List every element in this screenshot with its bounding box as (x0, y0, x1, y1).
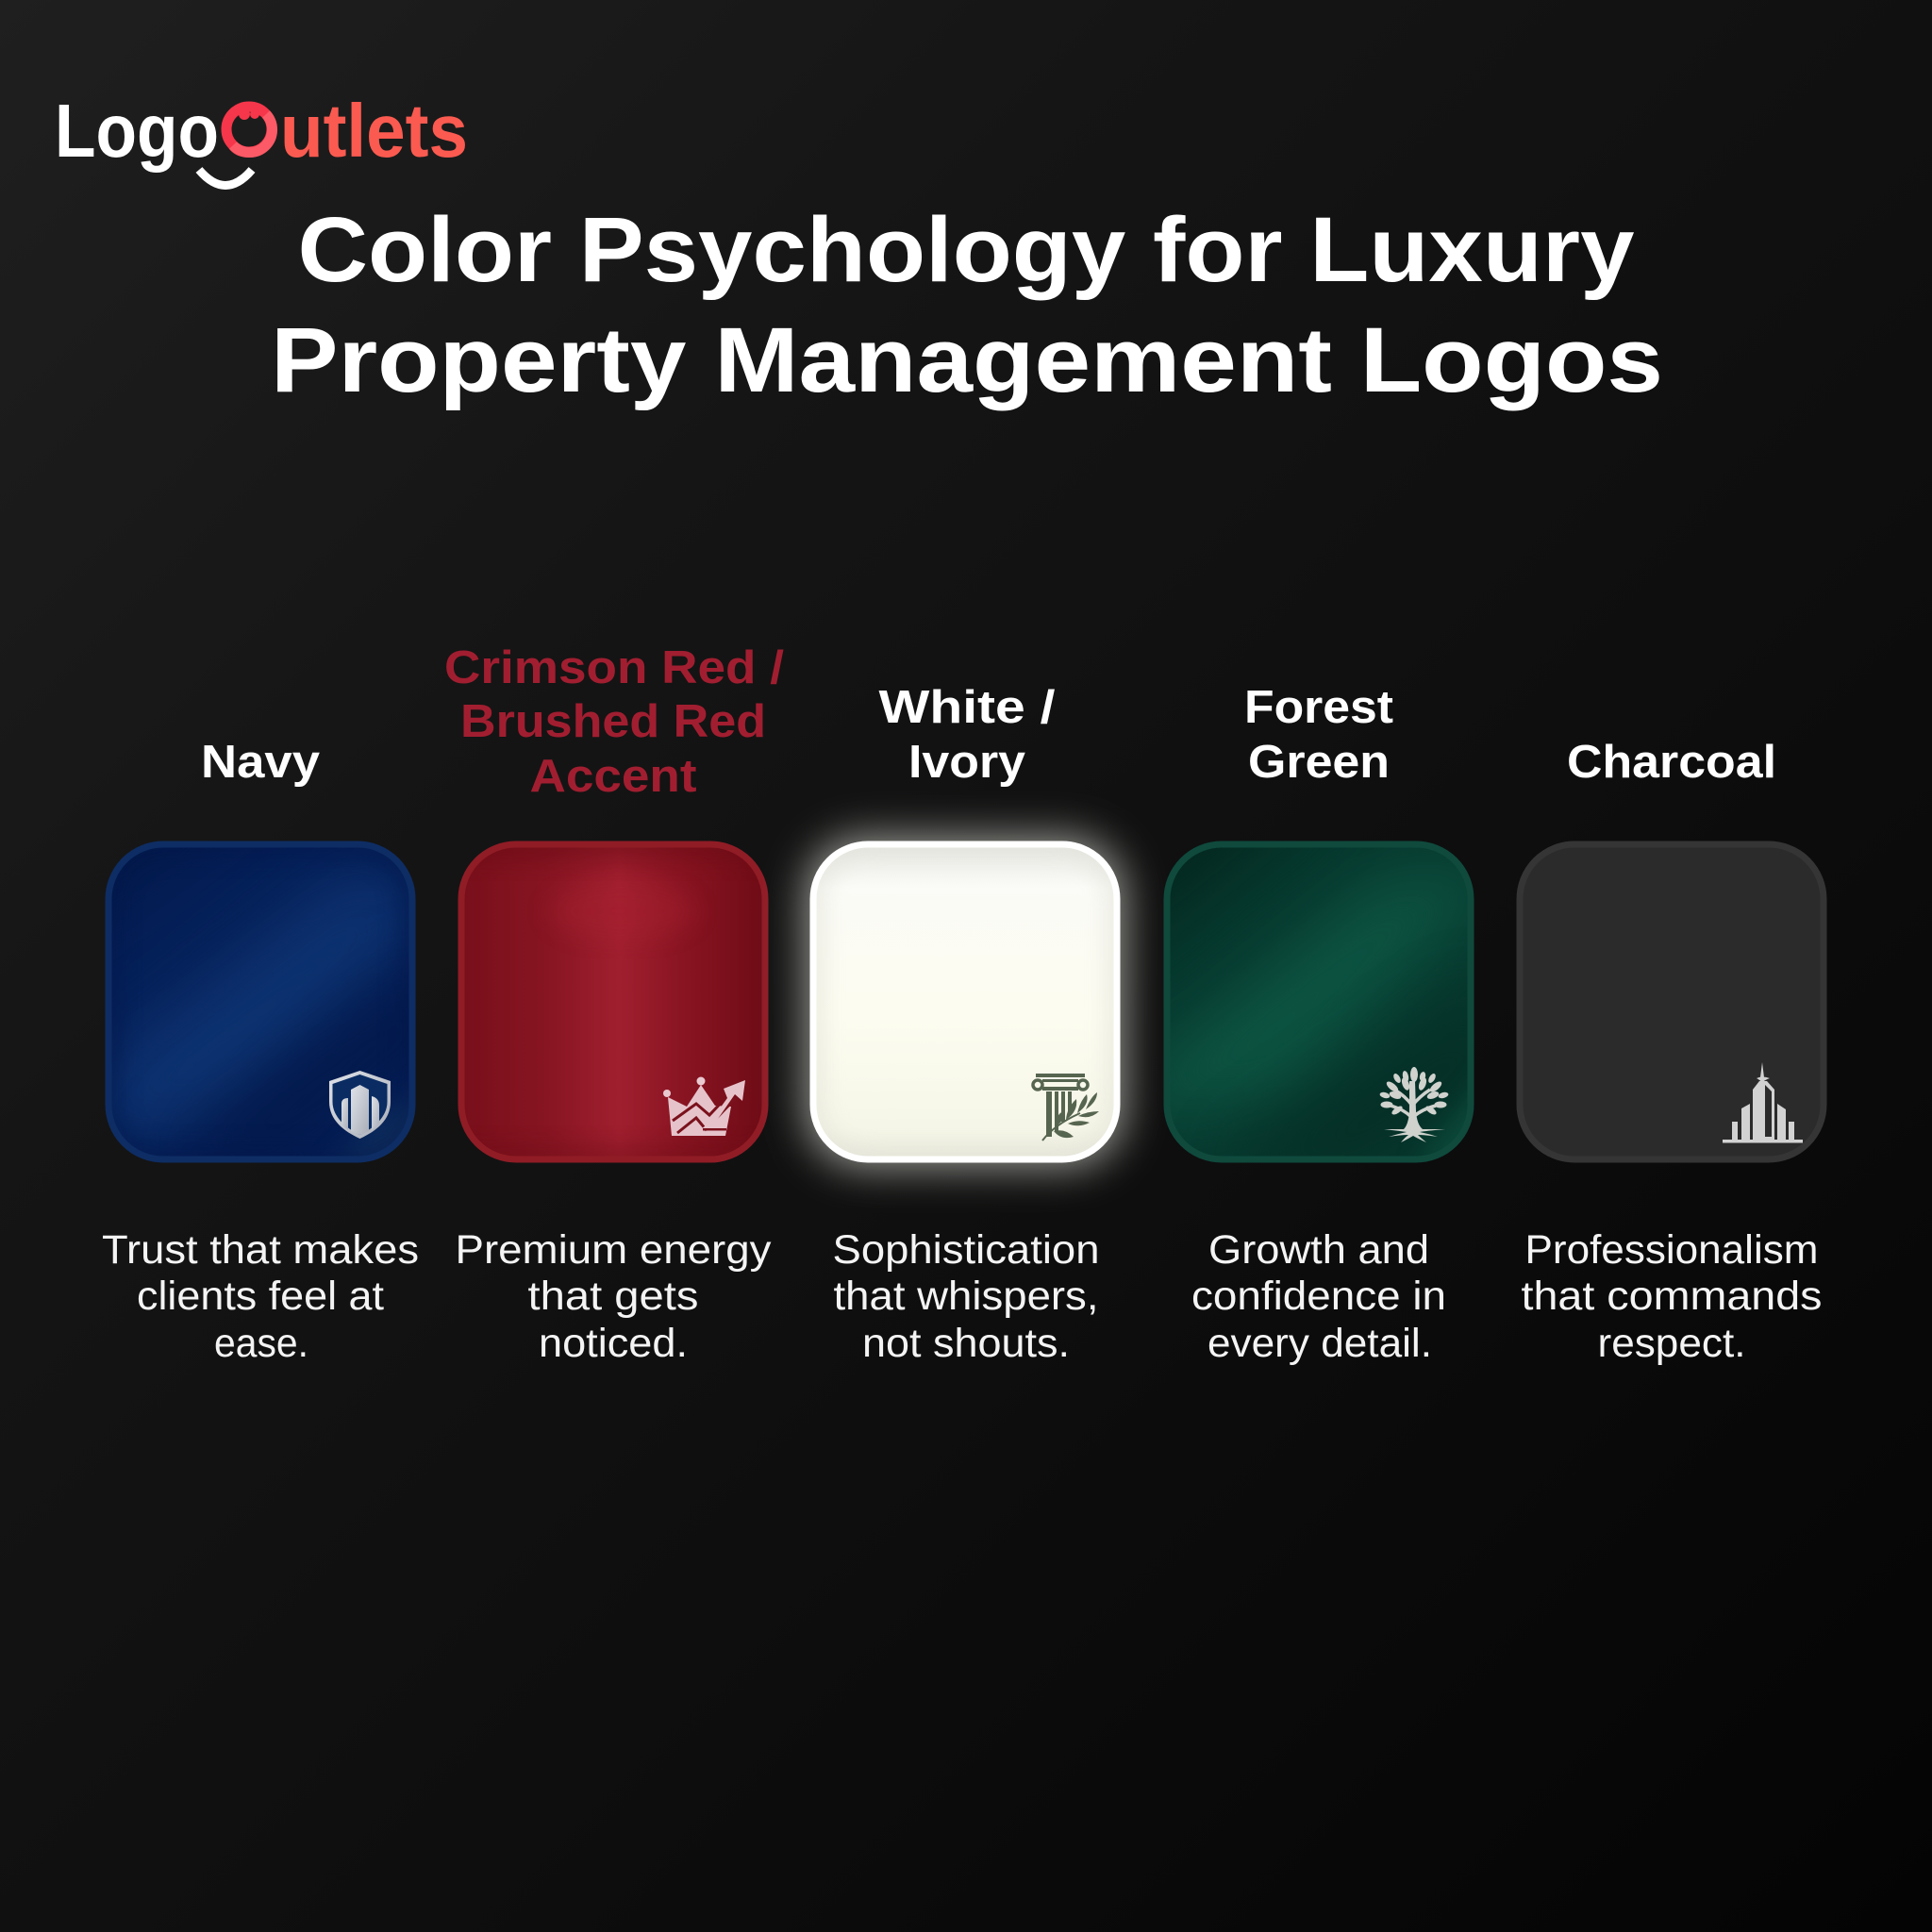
heading: forest green: Green (1248, 737, 1390, 788)
heading: white / ivory: Ivory (908, 737, 1025, 788)
icon: column with olive branch (1033, 1074, 1099, 1141)
logo: LogoOutlets: O (221, 89, 277, 173)
description: forest green: Growth and (1208, 1227, 1429, 1273)
heading: charcoal: Charcoal (1567, 737, 1776, 788)
heading: white / ivory (879, 682, 1056, 788)
panel: crimson red (439, 642, 788, 1366)
logo: LogoOutlets: Logo (55, 89, 219, 173)
panel: white / ivory (806, 682, 1124, 1366)
swatch: forest green (1164, 841, 1474, 1162)
title (271, 198, 1663, 411)
title: Color Psychology for Luxury (298, 198, 1635, 301)
panel: forest green (1164, 691, 1474, 1365)
icon: shield with towers (329, 1071, 391, 1139)
heading: crimson red: Crimson Red / (444, 642, 784, 693)
description: white / ivory: not shouts. (862, 1321, 1070, 1366)
heading: forest green (1244, 682, 1393, 788)
description: forest green: every detail. (1208, 1321, 1432, 1366)
panel: charcoal (1520, 737, 1824, 1366)
swatch: navy (106, 841, 415, 1162)
swatch: crimson red (458, 841, 768, 1162)
heading: crimson red (444, 642, 784, 802)
swatch: white / ivory (806, 837, 1124, 1167)
logo: LogoOutlets: utlets (280, 89, 468, 173)
panel: navy (103, 745, 417, 1357)
description: charcoal: Professionalism (1524, 1227, 1819, 1273)
description: crimson red (455, 1227, 772, 1366)
description: forest green (1191, 1227, 1446, 1366)
description: white / ivory (832, 1227, 1100, 1366)
description: navy: ease. (214, 1321, 308, 1366)
heading: crimson red: Accent (530, 751, 696, 802)
description: white / ivory: Sophistication (832, 1227, 1100, 1273)
description: charcoal (1521, 1227, 1823, 1366)
description: charcoal: respect. (1598, 1321, 1745, 1366)
description: navy: clients feel at (137, 1274, 384, 1319)
title: Property Management Logos (271, 308, 1663, 411)
description: crimson red: noticed. (539, 1321, 688, 1366)
heading: white / ivory: White / (879, 682, 1056, 733)
heading: navy: Navy (201, 737, 320, 788)
icon: tree (1379, 1067, 1449, 1142)
description: charcoal: that commands (1521, 1274, 1823, 1319)
description: crimson red: Premium energy (455, 1227, 772, 1273)
swatch: charcoal (1520, 844, 1824, 1159)
description: navy: Trust that makes (102, 1227, 419, 1273)
heading: forest green: Forest (1244, 682, 1393, 733)
description: crimson red: that gets (528, 1274, 698, 1319)
icon: skyscrapers (1723, 1062, 1803, 1143)
logo: LogoOutlets (55, 89, 468, 185)
description: white / ivory: that whispers, (834, 1274, 1098, 1319)
description: navy (102, 1227, 419, 1366)
heading: crimson red: Brushed Red (460, 696, 766, 747)
description: forest green: confidence in (1191, 1274, 1446, 1319)
icon: crown with rising arrow (663, 1077, 745, 1136)
